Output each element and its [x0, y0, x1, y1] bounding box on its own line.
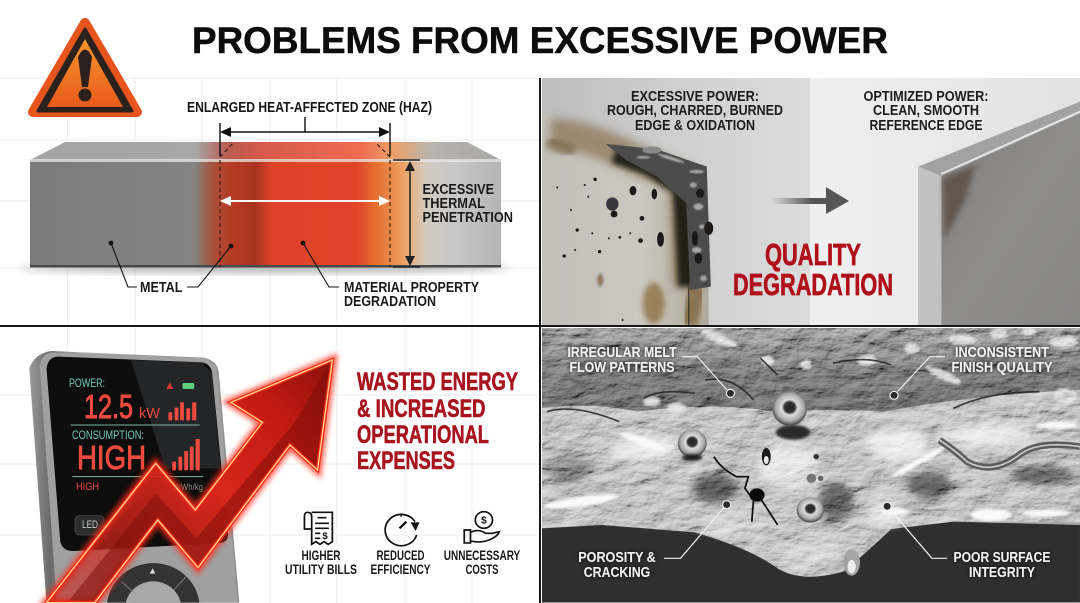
label: excessive power: EXCESSIVE POWER: [631, 89, 759, 105]
icon: bill: $ [322, 531, 328, 542]
label: metal [109, 241, 233, 296]
meter device: LED [82, 519, 98, 531]
label: porosity and cracking: POROSITY & [578, 550, 656, 566]
label: higher utility bills: UTILITY BILLS [285, 561, 357, 577]
heading: quality degradation: QUALITY [765, 237, 861, 272]
burned plate [540, 112, 713, 325]
heading: quality degradation: DEGRADATION [733, 267, 893, 302]
label: irregular melt flow patterns: IRREGULAR MELT [568, 345, 677, 361]
title: PROBLEMS FROM EXCESSIVE POWER [192, 20, 888, 61]
icon: warning triangle [33, 23, 137, 112]
label: excessive thermal penetration: EXCESSIVE [422, 182, 494, 198]
metal block [30, 142, 501, 268]
meter device: 12.5 [84, 388, 133, 425]
liquid metal texture [540, 325, 1080, 585]
label: excessive power: ROUGH, CHARRED, BURNED [607, 103, 783, 119]
panel: quality degradation [540, 78, 1080, 325]
label: material property degradation [301, 241, 479, 310]
icon: bill [304, 512, 332, 544]
meter device: HIGH [76, 481, 99, 493]
charred edge [605, 144, 711, 290]
label: poor surface integrity [954, 550, 1051, 581]
HAZ dimension [187, 100, 432, 267]
icon: hand with coin [464, 512, 499, 543]
label: porosity and cracking [578, 550, 656, 578]
label: optimized power: OPTIMIZED POWER: [864, 89, 988, 105]
label: excessive power [608, 91, 782, 130]
callout leaders [664, 357, 947, 558]
meter device: CONSUMPTION: [72, 430, 144, 442]
panel: melt surface [540, 325, 1080, 603]
panel: heat-affected zone [0, 78, 540, 325]
crack [714, 457, 778, 525]
heading: wasted energy: & INCREASED [357, 395, 486, 423]
label: reduced efficiency [371, 550, 430, 574]
label: metal: METAL [140, 280, 183, 296]
label: optimized power [864, 91, 988, 130]
label: excessive thermal penetration [422, 182, 513, 226]
label: reduced efficiency: REDUCED [376, 547, 424, 563]
meter device: HIGH [77, 439, 146, 476]
meter device: kWh/kg [177, 482, 203, 492]
top highlights [643, 326, 1077, 413]
label: higher utility bills: HIGHER [302, 547, 340, 563]
spheres [678, 392, 824, 523]
droplet [843, 549, 860, 576]
heading: wasted energy: OPERATIONAL [357, 421, 489, 449]
meter device [29, 351, 239, 603]
dark melt ridges [547, 358, 1039, 422]
label: unnecessary costs [444, 550, 520, 574]
thermal penetration arrow [393, 160, 420, 267]
grey arrow [772, 187, 849, 214]
icon: hand with coin: $ [481, 516, 487, 527]
meter device: POWER: [69, 378, 105, 390]
label: excessive thermal penetration: THERMAL [422, 196, 485, 212]
label: optimized power: CLEAN, SMOOTH [873, 103, 979, 119]
label: porosity and cracking: CRACKING [584, 565, 650, 581]
label: excessive thermal penetration: PENETRATION [422, 210, 513, 226]
heading: wasted energy: WASTED ENERGY [357, 368, 518, 396]
label: inconsistent finish quality: FINISH QUALITY [952, 360, 1053, 376]
wave [940, 440, 1080, 467]
label: material property degradation: DEGRADATION [344, 294, 436, 310]
scorch marks [547, 133, 698, 325]
heading: quality degradation [734, 243, 892, 296]
label: higher utility bills [286, 550, 356, 574]
label: inconsistent finish quality [952, 345, 1053, 376]
white width arrow [220, 196, 390, 206]
label: excessive power: EDGE & OXIDATION [635, 118, 755, 134]
clean plate [918, 102, 1080, 325]
arrow: rising cost [46, 360, 332, 603]
meter device: kW [139, 405, 161, 422]
heading: wasted energy [357, 368, 518, 475]
label: poor surface integrity: INTEGRITY [969, 565, 1035, 581]
panel: wasted energy [0, 328, 540, 603]
HAZ dimension: ENLARGED HEAT-AFFECTED ZONE (HAZ) [187, 100, 432, 116]
label: inconsistent finish quality: INCONSISTENT [955, 345, 1049, 361]
molten metal band [540, 390, 1080, 577]
label: irregular melt flow patterns [568, 345, 677, 376]
label: optimized power: REFERENCE EDGE [870, 118, 983, 134]
label: unnecessary costs: COSTS [466, 561, 498, 577]
label: reduced efficiency: EFFICIENCY [370, 561, 431, 577]
heading: wasted energy: EXPENSES [357, 447, 455, 475]
label: irregular melt flow patterns: FLOW PATTERNS [570, 360, 675, 376]
label: unnecessary costs: UNNECESSARY [444, 547, 521, 563]
label: poor surface integrity: POOR SURFACE [954, 550, 1051, 566]
label: material property degradation: MATERIAL PROPERTY [344, 280, 479, 296]
icon: gauge [385, 513, 419, 546]
